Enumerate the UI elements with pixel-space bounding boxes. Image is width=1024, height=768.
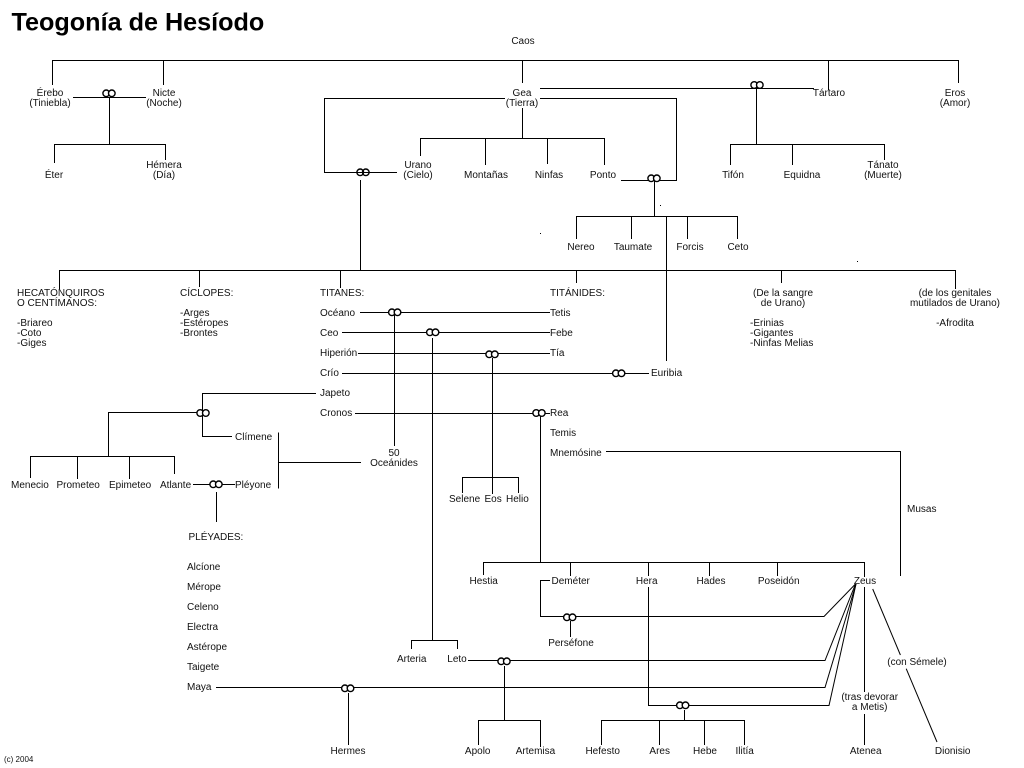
label: Ninfas: Ninfas	[535, 170, 563, 181]
label: Epimeteo: Epimeteo	[109, 480, 152, 491]
heading: Titánides: TITÁNIDES:	[550, 286, 605, 299]
family: Gea and Ponto	[540, 98, 749, 361]
label: Ceto: Ceto	[727, 242, 749, 253]
icon: union symbol	[486, 351, 498, 358]
icon: union symbol	[103, 90, 115, 97]
family: Maya and Zeus	[216, 584, 856, 757]
connector: Zeus to Dionisio	[873, 589, 937, 742]
icon: union symbol	[533, 410, 545, 416]
label: Ares: Ares	[649, 746, 670, 757]
family: Zeus and Sémele, Dionisio	[873, 589, 971, 757]
label: Hémera: (Día)	[153, 170, 175, 181]
label: Eos: Eos	[484, 494, 502, 505]
heading: Titanes: TITANES:	[320, 288, 364, 299]
stray dots from the source scan	[540, 205, 858, 262]
label: 50 Oceánides: Oceánides	[370, 458, 418, 469]
family: Érebo and Nicte	[45, 90, 182, 181]
heading: Pléyades: PLÉYADES:	[188, 530, 243, 543]
label: Helio: Helio	[506, 494, 529, 505]
text block: Hecatónquiros: -Briareo	[17, 318, 53, 329]
family: Leto and Zeus	[447, 584, 856, 757]
icon: union symbol	[427, 329, 439, 336]
label: Hiperión: Hiperión	[320, 348, 357, 359]
text block: Pléyades list: Celeno	[187, 602, 219, 613]
label: Hera: Hera	[636, 576, 658, 587]
text block: de los genitales de Urano: mutilados de Urano)	[910, 298, 1000, 309]
label: Tánato: (Muerte)	[864, 170, 902, 181]
connector: Crío to Euribia	[342, 372, 649, 374]
label: tras devorar a Metis: a Metis)	[852, 702, 887, 713]
label: Prometeo: Prometeo	[56, 480, 100, 491]
connector: Caos branches	[52, 60, 958, 90]
family: Cronos and Rea	[320, 408, 864, 587]
text block: Pléyades list: Maya	[187, 682, 212, 693]
text block: de la sangre de Urano: (De la sangre	[753, 288, 813, 299]
text block: de los genitales de Urano: -Afrodita	[936, 318, 974, 329]
label: Caos: Caos	[511, 36, 535, 47]
family: Océano and Tetis	[278, 308, 571, 488]
text block: Erinias, Gigantes, Ninfas Melias: -Erinias	[750, 318, 784, 329]
connector: Érebo to Nicte children	[54, 98, 166, 163]
label: Cronos: Cronos	[320, 408, 352, 419]
icon: union symbol	[751, 82, 763, 88]
label: Tifón: Tifón	[722, 170, 744, 181]
label: Pléyone: Pléyone	[235, 480, 272, 491]
family: Hiperión and Tía	[320, 348, 565, 505]
connector: Mnemósine to Zeus	[606, 452, 900, 576]
label: Ceo: Ceo	[320, 328, 339, 339]
connector: Gea children	[420, 108, 604, 165]
label: Leto: Leto	[447, 654, 467, 665]
icon: union symbol	[197, 410, 209, 416]
text block: de los genitales de Urano: (de los genitales	[919, 288, 991, 299]
label: Érebo: Érebo	[37, 86, 64, 99]
connector: Cronos to Rea children	[355, 413, 864, 577]
family: Mnemósine and Musas	[550, 448, 936, 576]
label: Tetis: Tetis	[550, 308, 571, 319]
icon: union symbol	[342, 685, 354, 692]
label: Hades: Hades	[697, 576, 725, 587]
icon: union symbol	[564, 614, 576, 621]
icon: union symbol	[210, 481, 222, 488]
connector: Deméter to Zeus	[540, 580, 856, 637]
icon: union symbol	[677, 702, 689, 709]
label: Hermes: Hermes	[330, 746, 366, 757]
label: Selene: Selene	[449, 494, 481, 505]
connector: Japeto to Clímene children	[30, 394, 316, 479]
label: Hebe: Hebe	[693, 746, 717, 757]
copyright: (c) 2004	[4, 755, 34, 764]
connector: Océano to Tetis	[360, 312, 550, 446]
family: Gea and Tártaro	[540, 82, 902, 181]
icon: union symbol	[613, 370, 625, 377]
text block: Hecatónquiros: -Giges	[17, 338, 46, 349]
label: 50 Oceánides: 50	[388, 448, 400, 459]
text block: Pléyades list: Electra	[187, 622, 219, 633]
connector: Oceánides wives bracket	[278, 432, 361, 488]
label: Zeus: Zeus	[854, 576, 876, 587]
text block: Pléyades list: Alcíone	[187, 562, 221, 573]
label: con Sémele: (con Sémele)	[887, 657, 947, 668]
text block: Pléyades list: Astérope	[187, 642, 227, 653]
label: Musas: Musas	[907, 504, 936, 515]
label: Éter: Éter	[45, 168, 64, 181]
label: Japeto: Japeto	[320, 388, 350, 399]
label: Océano: Océano	[320, 308, 355, 319]
connector: Hera to Zeus	[602, 584, 856, 745]
label: Nicte: (Noche)	[146, 98, 182, 109]
label: Perséfone: Perséfone	[548, 638, 594, 649]
text block: Erinias, Gigantes, Ninfas Melias: -Gigantes	[750, 328, 793, 339]
label: Eros: Eros	[945, 88, 965, 99]
text block: de la sangre de Urano: de Urano)	[761, 298, 805, 309]
label: Nereo: Nereo	[567, 242, 595, 253]
label: tras devorar a Metis: (tras devorar	[841, 692, 899, 703]
label: Deméter: Deméter	[552, 576, 591, 587]
family: Deméter and Zeus	[540, 580, 856, 649]
text block: Cíclopes: -Arges	[180, 308, 209, 319]
label: Rea: Rea	[550, 408, 569, 419]
icon: union symbol	[357, 169, 369, 176]
family: Gea alone	[403, 108, 617, 181]
label: Hémera: Hémera	[146, 160, 182, 171]
label: Clímene: Clímene	[235, 432, 273, 443]
label: Nicte: Nicte	[153, 88, 176, 99]
title: Teogonía de Hesíodo	[12, 8, 264, 36]
family: Japeto and Clímene	[11, 388, 350, 491]
connector: Zeus to Atenea	[864, 587, 866, 745]
label: Ilitía: Ilitía	[736, 746, 754, 757]
label: Equidna: Equidna	[784, 170, 821, 181]
label: Mnemósine: Mnemósine	[550, 448, 602, 459]
label: Urano: Urano	[404, 160, 432, 171]
label: Tía: Tía	[550, 348, 565, 359]
family: Zeus alone, Atenea	[841, 576, 899, 757]
family: Hera and Zeus	[585, 584, 856, 757]
label: Gea: Gea	[513, 88, 532, 99]
label: Temis: Temis	[550, 428, 576, 439]
label: Hefesto: Hefesto	[585, 746, 620, 757]
text block: Cíclopes: -Brontes	[180, 328, 218, 339]
text block: Hecatónquiros: HECATÓNQUIROS	[17, 286, 105, 299]
label: Dionisio: Dionisio	[935, 746, 971, 757]
label: Taumate: Taumate	[614, 242, 653, 253]
label: Euribia: Euribia	[651, 368, 683, 379]
text block: Pléyades list: Taigete	[187, 662, 220, 673]
family: Ceo and Febe	[320, 328, 573, 665]
text block: Hecatónquiros: O CENTÍMANOS:	[17, 296, 97, 309]
family: Atlante and Pléyone	[187, 480, 272, 693]
icon: union symbol	[648, 175, 660, 182]
label: Ponto: Ponto	[590, 170, 617, 181]
label: Hestia: Hestia	[470, 576, 498, 587]
connector: Maya to Zeus	[216, 584, 856, 745]
text block: Hecatónquiros: -Coto	[17, 328, 42, 339]
connector: Hiperión to Tía	[358, 354, 550, 494]
label: Urano: (Cielo)	[403, 170, 433, 181]
connector: Leto to Zeus	[468, 584, 856, 747]
connector: Gea to Ponto children	[540, 98, 738, 361]
family: Crío and Euribia	[320, 368, 683, 379]
label: Artemisa: Artemisa	[516, 746, 556, 757]
label: Gea: (Tierra)	[506, 98, 538, 109]
label: Atlante: Atlante	[160, 480, 192, 491]
label: Tánato: Tánato	[867, 160, 899, 171]
label: Poseidón: Poseidón	[758, 576, 800, 587]
connector: Atlante to Pléyone	[193, 484, 235, 522]
text block: Cíclopes: -Estéropes	[180, 318, 228, 329]
icon: union symbol	[389, 309, 401, 316]
text block: Cíclopes: CÍCLOPES:	[180, 286, 233, 299]
label: Arteria: Arteria	[397, 654, 427, 665]
label: Menecio: Menecio	[11, 480, 49, 491]
text block: Pléyades list: Mérope	[187, 582, 221, 593]
Caos and its five children	[29, 36, 970, 109]
label: Tártaro: Tártaro	[813, 88, 846, 99]
label: Crío: Crío	[320, 368, 339, 379]
connector: Ceo to Febe	[342, 332, 550, 649]
family: Gea and Urano	[17, 98, 1000, 349]
label: Forcis: Forcis	[676, 242, 704, 253]
label: Érebo: (Tiniebla)	[29, 98, 71, 109]
label: Atenea: Atenea	[850, 746, 882, 757]
connector: Gea to Urano children	[60, 98, 956, 289]
label: Eros: (Amor)	[940, 98, 970, 109]
connector: Gea to Tártaro children	[540, 88, 884, 165]
label: Febe: Febe	[550, 328, 573, 339]
label: Apolo: Apolo	[465, 746, 491, 757]
label: Montañas: Montañas	[464, 170, 508, 181]
icon: union symbol	[498, 658, 510, 665]
text block: Erinias, Gigantes, Ninfas Melias: -Ninfas Melias	[750, 338, 813, 349]
